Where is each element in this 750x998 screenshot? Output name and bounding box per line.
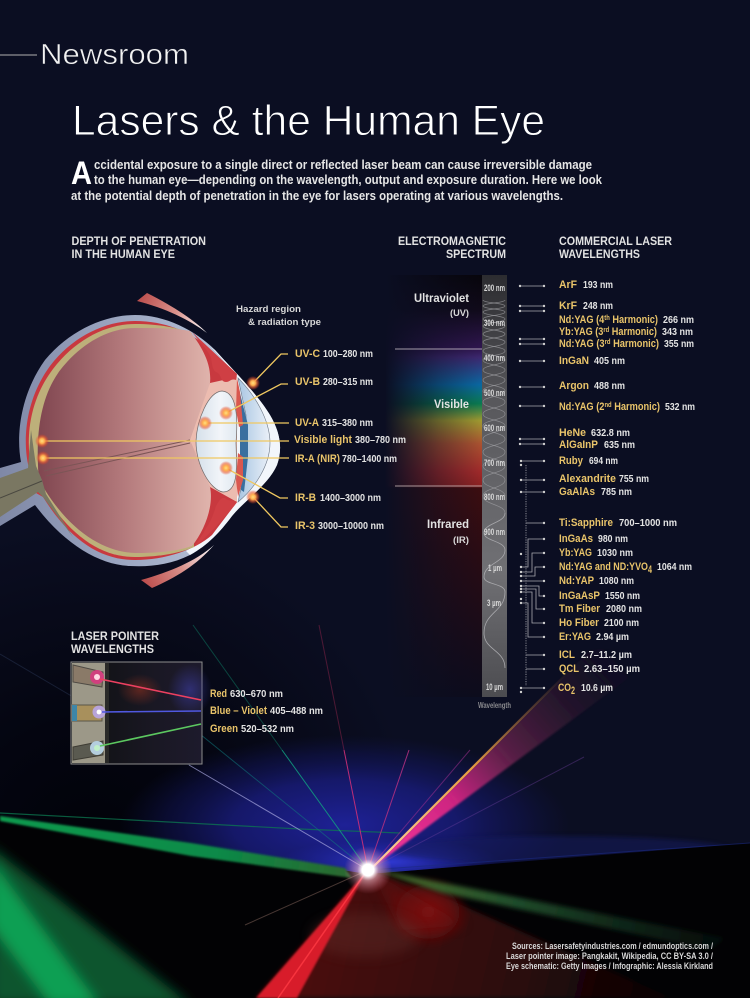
laser pointer labels: Red [210,688,227,700]
commercial laser list: InGaAsP [559,590,600,602]
laser pointer labels: 520–532 nm [241,724,294,735]
commercial laser list: 10.6 µm [581,683,613,694]
commercial laser list: Ti:Sapphire [559,517,613,529]
commercial laser list: 2.63–150 µm [584,664,640,675]
laser light background [0,611,750,998]
commercial laser list: Nd:YAP [559,575,594,587]
laser pointer labels [210,688,323,735]
eye hazard labels: UV-C [295,348,320,360]
wavelength axis label: Wavelength [478,700,511,710]
heading: commercial laser wavelengths: COMMERCIAL LASER [559,236,673,248]
scale labels: 500 nm [484,388,505,398]
commercial laser list: 248 nm [583,301,613,312]
commercial laser list [558,279,695,697]
heading: commercial laser wavelengths: WAVELENGTHS [559,249,640,261]
commercial laser list: 405 nm [594,356,625,367]
commercial laser list: QCL [559,663,579,675]
intro paragraph [71,155,602,203]
scale labels: 700 nm [484,458,505,468]
eye hazard labels: 315–380 nm [322,418,373,429]
heading: laser pointer wavelengths [71,631,160,656]
scale labels: 10 µm [486,682,503,692]
spectrum region labels: Ultraviolet [414,291,469,305]
commercial laser list: 193 nm [583,280,613,291]
commercial laser list: Harmonic) [609,326,657,338]
sources credit: Laser pointer image: Pangkakit, Wikipedia, CC BY-SA 3.0 / [506,951,713,961]
commercial laser list: Tm Fiber [559,603,601,615]
laser beams [100,679,201,746]
eye hazard labels: UV-B [295,376,320,388]
commercial laser list: Ruby [559,455,584,467]
laser pointer labels: Green [210,723,238,735]
eye hazard labels: 380–780 nm [355,435,406,446]
section label: Newsroom: Newsroom [40,39,189,71]
heading: depth of penetration [72,236,206,261]
eye hazard labels: IR-3 [295,520,315,532]
commercial laser list: Er:YAG [559,631,591,643]
eye hazard labels: 1400–3000 nm [320,493,381,504]
spectrum region labels: Visible [434,397,469,411]
commercial laser list: InGaN [559,355,589,367]
commercial laser list: rd [603,327,609,334]
scale labels: 1 µm [488,563,502,573]
eye hazard labels: IR-B [295,492,316,504]
commercial laser list: 532 nm [665,402,695,413]
commercial laser list: Nd:YAG and ND:YVO [559,561,648,573]
commercial laser list: Nd:YAG (4 [559,314,613,326]
scale labels: 300 nm [484,318,505,328]
eye hazard labels: IR-A (NIR) [295,453,340,465]
scale labels: 200 nm [484,283,505,293]
commercial laser list: GaAlAs [559,486,595,498]
intro paragraph: ccidental exposure to a single direct or reflected laser beam can cause irreversible damage [94,158,592,172]
commercial laser list: Alexandrite [559,473,616,485]
commercial laser list: nd [604,402,612,409]
spectrum colour band [385,275,482,697]
commercial laser list: KrF [559,300,577,312]
heading: commercial laser wavelengths [559,236,673,261]
intro paragraph: to the human eye—depending on the wavelength, output and exposure duration. Here we look [94,173,602,187]
intro paragraph: at the potential depth of penetration in the eye for lasers operating at various wavelengths. [71,189,563,203]
commercial laser list: 1030 nm [597,548,633,559]
eye hazard labels: 780–1400 nm [342,454,397,465]
eye hazard labels: UV-A [295,417,319,429]
commercial laser list: AlGaInP [559,439,598,451]
commercial laser list: 2.7–11.2 µm [581,650,632,661]
commercial laser list: ArF [559,279,577,291]
spectrum region labels [414,291,469,545]
scale labels: 3 µm [487,598,501,608]
commercial laser list: HeNe [559,427,586,439]
scale labels: 600 nm [484,423,505,433]
commercial laser list: 694 nm [589,456,618,467]
commercial laser list: 2100 nm [604,618,639,629]
commercial laser list: 2080 nm [606,604,642,615]
commercial laser list: Argon [559,380,589,392]
spectrum region labels: Infrared [427,517,469,531]
laser pointer labels: 405–488 nm [270,706,323,717]
intro paragraph: A [71,155,92,191]
commercial laser list: 266 nm [663,315,694,326]
heading: depth of penetration: DEPTH OF PENETRATION [72,236,206,248]
commercial laser list: 355 nm [664,339,694,350]
heading: depth of penetration: IN THE HUMAN EYE [72,249,175,261]
sources credit [506,941,713,971]
commercial laser list: Nd:YAG (3 [559,338,613,350]
laser pointer labels: Blue – Violet [210,705,267,717]
commercial laser list: Harmonic) [610,338,659,350]
commercial laser list: 488 nm [594,381,625,392]
commercial laser list: Yb:YAG (3 [559,326,612,338]
eye cross-section diagram [0,293,289,588]
commercial laser list: 980 nm [598,534,628,545]
commercial laser list: CO [558,682,571,694]
commercial laser list: InGaAs [559,533,593,545]
hazard spots [35,376,260,504]
commercial laser list: 343 nm [662,327,693,338]
commercial laser list: 4 [648,564,653,576]
hazard leader lines [42,354,289,527]
optic nerve [0,430,73,537]
scale labels: 900 nm [484,527,505,537]
commercial laser list: 635 nm [604,440,635,451]
heading: electromagnetic spectrum [398,236,506,261]
commercial laser list: 1064 nm [657,562,692,573]
eye hazard labels: 100–280 nm [323,349,373,360]
laser pointer photo [71,662,212,764]
eye hazard labels: 280–315 nm [323,377,373,388]
eye hazard labels: Visible light [294,434,352,446]
commercial laser list: th [604,315,610,322]
hazard region note: & radiation type [248,317,321,327]
commercial laser list: rd [605,339,610,346]
laser pointer labels: 630–670 nm [230,689,283,700]
commercial laser list: ICL [559,649,575,661]
commercial laser list: 632.8 nm [591,428,630,439]
commercial laser list: 785 nm [601,487,632,498]
scale labels: 800 nm [484,492,505,502]
commercial laser list: Ho Fiber [559,617,600,629]
heading: laser pointer wavelengths: WAVELENGTHS [71,644,154,656]
hazard region note: Hazard region [236,304,301,314]
commercial laser list: 1550 nm [605,591,640,602]
commercial laser list: 755 nm [619,474,649,485]
heading: laser pointer wavelengths: LASER POINTER [71,631,160,643]
eye hazard labels [294,348,406,532]
commercial laser list: 700–1000 nm [619,518,677,529]
hazard region note [236,304,321,327]
spectrum region labels: (UV) [450,308,469,318]
heading: electromagnetic spectrum: ELECTROMAGNETIC [398,236,506,248]
heading: electromagnetic spectrum: SPECTRUM [446,249,506,261]
commercial laser list: Harmonic) [610,314,658,326]
ciliary body [192,332,237,546]
commercial laser list: Nd:YAG (2 [559,401,613,413]
commercial laser list: Harmonic) [612,401,660,413]
commercial laser list: 2 [571,685,575,697]
connector lines to spectrum [519,285,545,693]
spectrum region labels: (IR) [453,535,469,545]
eye hazard labels: 3000–10000 nm [318,521,384,532]
scale labels [484,283,505,692]
title: Lasers & the Human Eye [72,97,545,145]
scale labels: 400 nm [484,353,505,363]
commercial laser list: 2.94 µm [596,632,629,643]
wavelength scale bar [482,275,507,697]
commercial laser list: 1080 nm [599,576,634,587]
commercial laser list: Yb:YAG [559,547,592,559]
